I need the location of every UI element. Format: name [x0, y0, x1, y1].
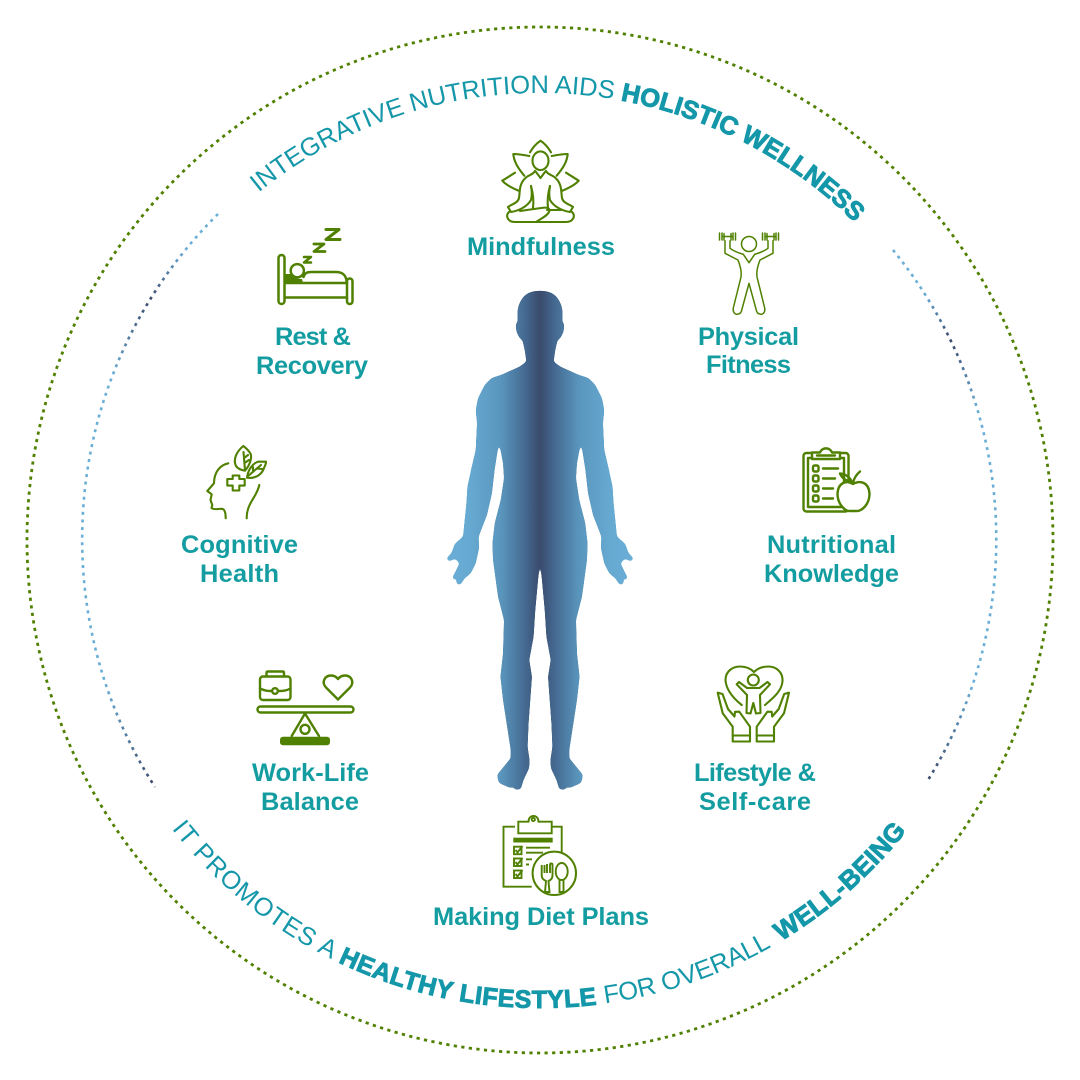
icon: meditating figure with lotus	[502, 141, 579, 222]
label: Knowledge	[764, 560, 899, 588]
left inner dotted arc	[82, 214, 218, 787]
item: Mindfulness	[467, 141, 615, 261]
item: Rest & Recovery	[256, 230, 368, 380]
icon: scale with briefcase and heart	[258, 672, 354, 745]
label: Recovery	[256, 352, 368, 380]
item: Cognitive Health	[181, 446, 298, 588]
item: Lifestyle & Self-care	[694, 666, 816, 816]
curved heading: top	[250, 76, 864, 220]
label: Lifestyle &	[694, 759, 816, 787]
icon: person lifting dumbbells	[720, 233, 778, 314]
label: Rest &	[275, 323, 351, 351]
label: Health	[200, 560, 279, 588]
curved heading: top: HOLISTIC WELLNESS	[622, 82, 864, 220]
curved heading: bottom: FOR OVERALL	[604, 936, 771, 1004]
right inner dotted arc	[893, 250, 996, 780]
human body silhouette	[446, 291, 634, 789]
label: Making Diet Plans	[433, 903, 649, 931]
label: Work-Life	[252, 759, 369, 787]
label: Fitness	[706, 351, 791, 379]
label: Mindfulness	[467, 233, 615, 261]
item: Physical Fitness	[698, 233, 799, 379]
label: Cognitive	[181, 531, 298, 559]
curved heading: bottom: HEALTHY LIFESTYLE	[338, 946, 596, 1008]
icon: person sleeping in bed	[278, 230, 352, 304]
item: Nutritional Knowledge	[764, 448, 899, 588]
label: Self-care	[699, 788, 811, 816]
item: Making Diet Plans	[433, 816, 649, 931]
curved heading: bottom	[173, 820, 904, 1008]
icon: hands holding heart and person	[718, 666, 789, 742]
label: Balance	[261, 788, 359, 816]
item: Work-Life Balance	[252, 672, 369, 816]
curved heading: top: INTEGRATIVE NUTRITION AIDS	[250, 76, 614, 192]
label: Physical	[698, 323, 799, 351]
curved heading: bottom: WELL-BEING	[770, 823, 904, 940]
curved heading: bottom: IT PROMOTES A	[173, 820, 334, 960]
label: Nutritional	[767, 531, 896, 559]
icon: head with cross and leaves	[207, 446, 266, 518]
icon: diet clipboard with plate	[504, 816, 576, 895]
icon: clipboard with apple	[804, 448, 870, 512]
